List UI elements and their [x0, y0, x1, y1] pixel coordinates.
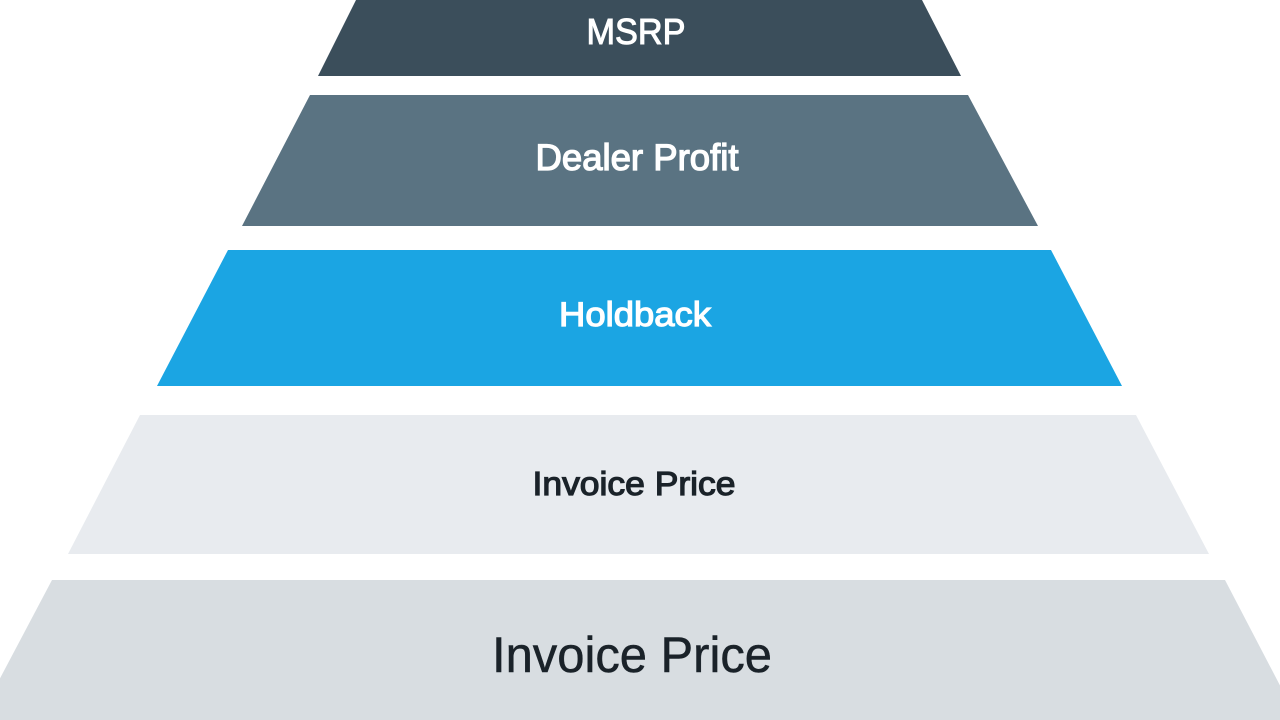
- tier: Holdback: Holdback: [559, 296, 712, 334]
- tier: Invoice Price lower: [0, 580, 1280, 720]
- tier: MSRP: [318, 0, 961, 76]
- tier: Invoice Price lower: Invoice Price: [492, 627, 772, 683]
- tier: MSRP: MSRP: [586, 11, 686, 52]
- tier: Dealer Profit: Dealer Profit: [536, 137, 739, 178]
- tier: Invoice Price upper: [68, 415, 1209, 554]
- tier: Holdback: [157, 250, 1122, 386]
- tier: Invoice Price upper: Invoice Price: [532, 465, 736, 502]
- tier: Dealer Profit: [242, 95, 1038, 226]
